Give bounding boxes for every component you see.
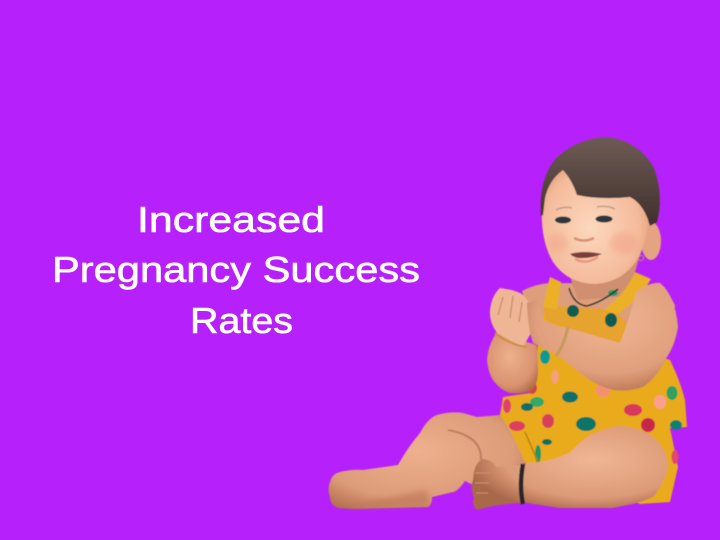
mouth [570, 252, 602, 258]
nose [574, 238, 594, 240]
knee crease [448, 430, 481, 460]
title [52, 199, 420, 341]
earring [638, 256, 644, 260]
eyes [555, 216, 571, 224]
left bangle [495, 333, 527, 347]
right strap [603, 272, 651, 314]
neck [565, 255, 640, 300]
necklace [569, 288, 618, 306]
fingers [498, 296, 522, 322]
right bangle [556, 327, 568, 356]
baby left fist [490, 288, 531, 347]
baby head [541, 137, 661, 306]
ear [641, 222, 661, 260]
photo: seated baby [328, 137, 687, 510]
smocked top [543, 306, 627, 343]
toes [475, 473, 490, 493]
baby right arm and hand [527, 283, 678, 391]
foot shadow [345, 490, 429, 507]
title: Rates [190, 300, 293, 341]
title: Pregnancy Success [52, 249, 420, 290]
shorts shadow seam [525, 432, 538, 462]
cheek blush [610, 232, 638, 254]
torso skin and shoulders [522, 283, 675, 345]
baby left arm [487, 332, 538, 393]
face [542, 159, 649, 284]
title: Increased [137, 199, 325, 240]
left strap [543, 277, 561, 310]
baby left leg and foot [328, 412, 525, 509]
polka dots [503, 290, 682, 464]
eyebrows [556, 206, 615, 210]
hair [541, 137, 660, 226]
baby right leg and foot [472, 426, 668, 510]
anklet [521, 464, 523, 504]
yellow polka-dot romper [500, 272, 687, 504]
